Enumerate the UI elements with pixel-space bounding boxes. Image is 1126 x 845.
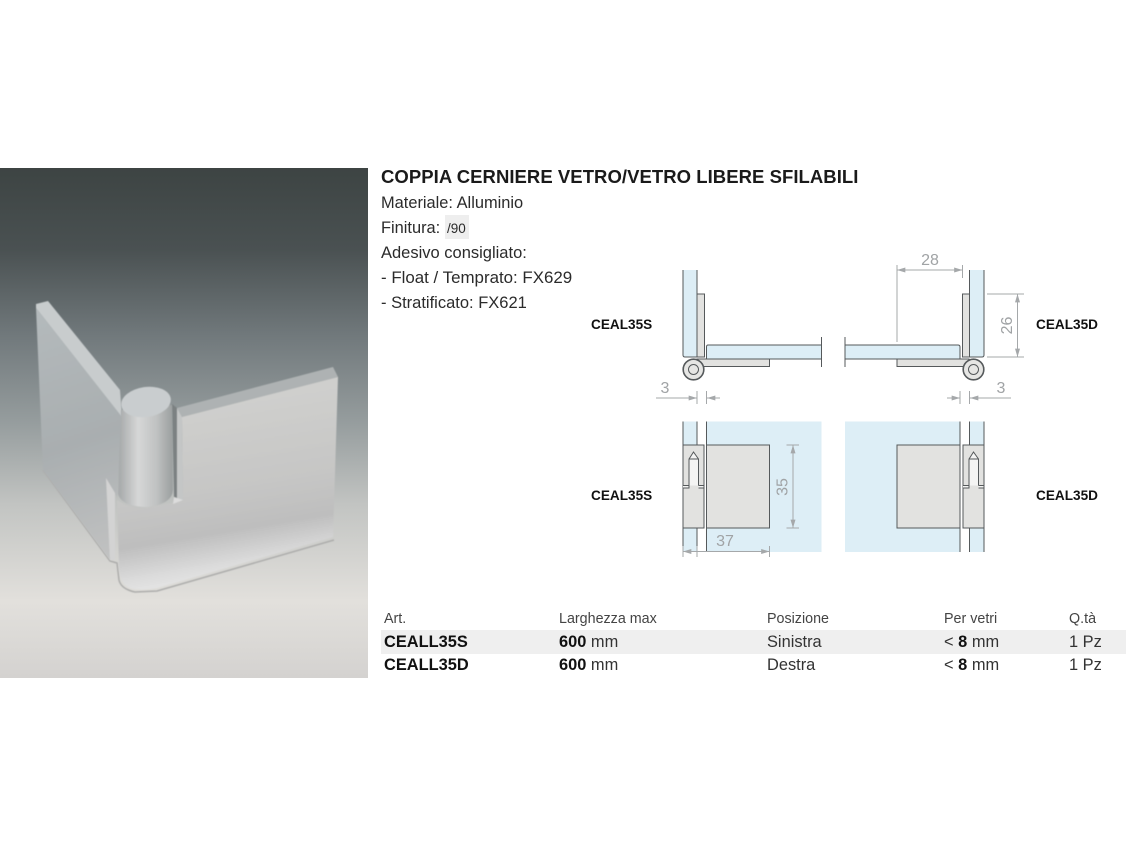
material: Materiale: Alluminio xyxy=(381,194,523,212)
dimension: 28 xyxy=(897,252,962,342)
table: articles xyxy=(381,630,1126,654)
drawing: front view CEAL35S xyxy=(683,422,822,552)
title: COPPIA CERNIERE VETRO/VETRO LIBERE SFILABILI xyxy=(381,166,858,187)
dimension: 28: 28 xyxy=(921,252,939,269)
table row highlight xyxy=(381,630,1126,654)
row 1 glass: < 8 mm xyxy=(944,633,999,651)
adhesive float: - Float / Temprato: FX629 xyxy=(381,268,572,287)
finish code: /90 xyxy=(447,220,466,236)
dimension: 37 xyxy=(683,533,770,557)
row 2 position: Destra xyxy=(767,656,815,674)
label: CEAL35D bottom: CEAL35D xyxy=(1036,488,1098,503)
table header: Per vetri: Per vetri xyxy=(944,610,997,626)
hinge barrel xyxy=(118,384,173,507)
row 2 quantity: 1 Pz xyxy=(1069,656,1102,674)
row 1 position: Sinistra xyxy=(767,633,822,651)
dimension: 3 left: 3 xyxy=(661,380,670,397)
dimension: 26: 26 xyxy=(999,316,1016,334)
dimension: 37: 37 xyxy=(716,533,734,550)
row 1 width: 600 mm xyxy=(559,633,618,651)
row 1 article: CEALL35S xyxy=(384,633,468,651)
table header: Larghezza max: Larghezza max xyxy=(559,610,657,626)
label: CEAL35D top: CEAL35D xyxy=(1036,317,1098,332)
drawing: front view CEAL35D xyxy=(845,422,984,552)
table header: Q.tà: Q.tà xyxy=(1069,610,1096,626)
specifications text block xyxy=(381,194,572,312)
dimension: 26 xyxy=(987,294,1024,357)
table header: Art.: Art. xyxy=(384,610,406,626)
dimension: 35: 35 xyxy=(774,478,792,496)
drawing: section CEAL35D xyxy=(845,270,984,380)
row 2 article: CEALL35D xyxy=(384,656,469,674)
label: CEAL35S bottom: CEAL35S xyxy=(591,488,652,503)
hinge right wing xyxy=(117,367,338,590)
row 1 quantity: 1 Pz xyxy=(1069,633,1102,651)
label: CEAL35S top: CEAL35S xyxy=(591,317,652,332)
dimension: 35 xyxy=(774,445,799,528)
drawing: section CEAL35S xyxy=(683,270,822,380)
hinge left wing xyxy=(36,301,122,560)
dimension: 3 left xyxy=(656,380,720,404)
dimension: 3 right: 3 xyxy=(997,380,1006,397)
photo: aluminium glass hinge xyxy=(0,168,368,678)
adhesive heading: Adesivo consigliato: xyxy=(381,244,527,262)
photo background xyxy=(0,168,368,678)
hinge shadow edge xyxy=(43,470,334,592)
dimension: 3 right xyxy=(947,380,1011,404)
table header: Posizione: Posizione xyxy=(767,610,829,626)
finish swatch xyxy=(445,215,469,239)
row 2 width: 600 mm xyxy=(559,656,618,674)
finish: Finitura: xyxy=(381,219,440,237)
row 2 glass: < 8 mm xyxy=(944,656,999,674)
adhesive laminated: - Stratificato: FX621 xyxy=(381,294,527,312)
